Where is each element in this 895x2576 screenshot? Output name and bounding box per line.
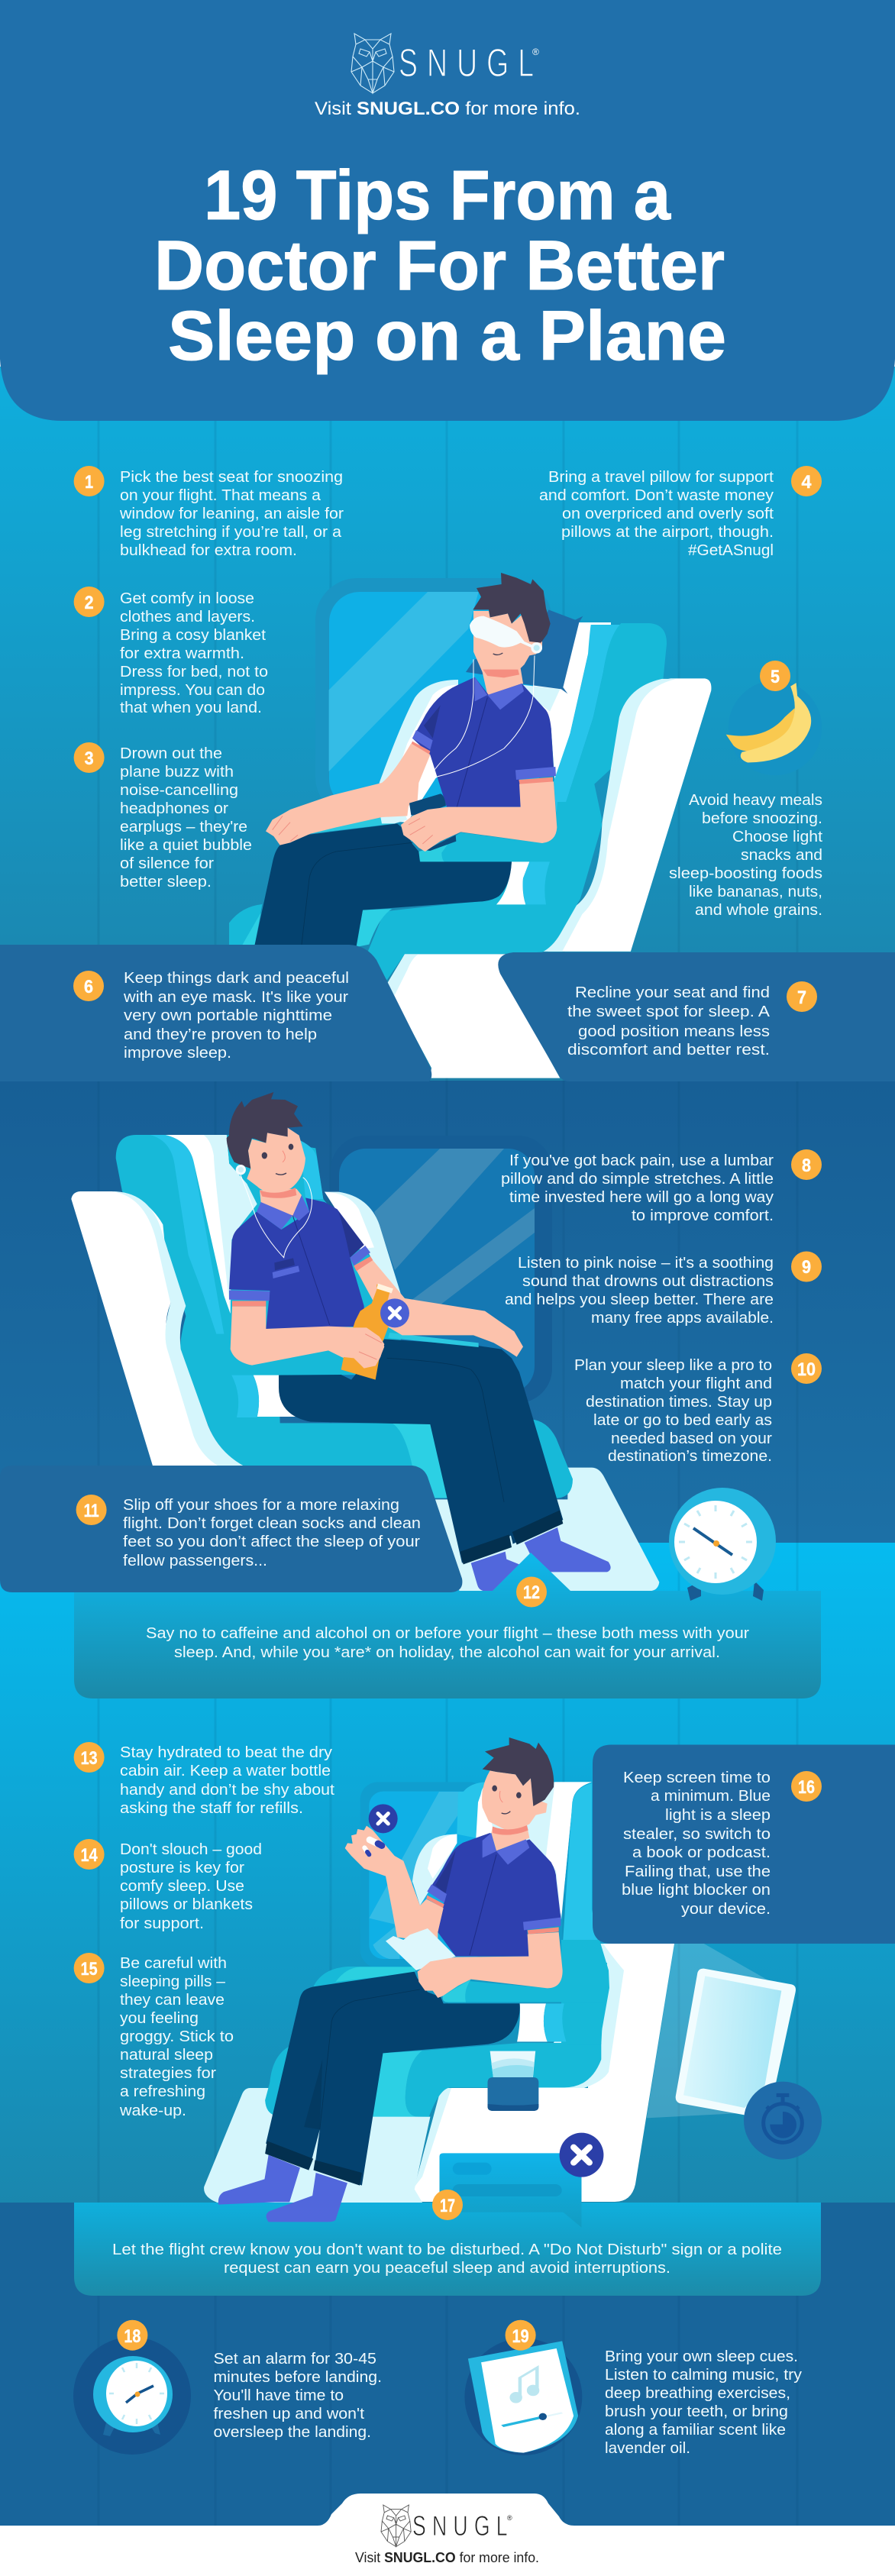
tip 14: 14 (81, 1845, 98, 1866)
icon: no-drink badge (380, 1298, 409, 1327)
panel: tip 7: discomfort and better rest. (567, 1042, 770, 1059)
footer logo: wordmark: SNUGL (412, 2510, 508, 2542)
tip 2: Dress for bed, not to (120, 664, 268, 680)
illustration: seat with sleeping man, eye mask (229, 573, 711, 1078)
tip 13 (74, 1742, 334, 1817)
tip 3: noise-cancelling (120, 782, 238, 799)
tip 5 with banana icon: Choose light (732, 829, 822, 845)
tip 4: Bring a travel pillow for support (548, 469, 774, 486)
tip 2: that when you land. (120, 700, 262, 716)
panel: tip 6: Keep things dark and peaceful (124, 970, 349, 987)
tip 15: 15 (81, 1959, 98, 1980)
tip 13: asking the staff for refills. (120, 1800, 303, 1817)
tip 14: pillows or blankets (120, 1896, 253, 1913)
footer logo: owl (381, 2505, 411, 2547)
tip 15: you feeling (120, 2010, 199, 2027)
tip 17 text and badge: request can earn you peaceful sleep and avoid interruptions. (224, 2260, 670, 2277)
tip 4 (539, 466, 822, 559)
tip 18 with clock icon (73, 2320, 382, 2455)
panel: tip 16: 16 (798, 1777, 815, 1798)
tip 17 text and badge: 17 (440, 2196, 455, 2216)
panel: tip 16: a book or podcast. (632, 1844, 771, 1861)
icon: music player card (464, 2338, 582, 2455)
tip 18 with clock icon: freshen up and won't (214, 2406, 364, 2422)
panel: tip 6: and they’re proven to help (124, 1026, 317, 1043)
tip 19 with music card icon: Listen to calming music, try (605, 2367, 802, 2384)
icon: no-pills badge (369, 1804, 398, 1833)
footer (0, 2494, 895, 2576)
illustration: seat with man holding a drink (71, 1092, 659, 1591)
tip 15: Be careful with (120, 1955, 227, 1972)
tip 9: many free apps available. (591, 1310, 774, 1327)
tip 2: 2 (85, 593, 94, 613)
tip 1: on your flight. That means a (120, 487, 321, 504)
tip 19 with music card icon: lavender oil. (605, 2440, 690, 2457)
tip 10: destination’s timezone. (608, 1448, 772, 1465)
panel: tip 16: Keep screen time to (623, 1770, 771, 1786)
icon: alarm clock (669, 1488, 776, 1601)
footer logo: registered mark: ® (507, 2514, 512, 2522)
illustration: seat with man and pills, book, water (204, 1737, 674, 2228)
background: dark cabin section (0, 1081, 895, 1543)
tip 5 with banana icon: sleep-boosting foods (669, 865, 822, 882)
tip 2: Bring a cosy blanket (120, 627, 266, 644)
tip 19 with music card icon (464, 2320, 802, 2457)
tip 15 (74, 1953, 234, 2119)
tip 10: needed based on your (611, 1430, 772, 1447)
panel: tip 12: Say no to caffeine and alcohol on or before your flight – these both mess with your (146, 1625, 749, 1642)
tip 5 with banana icon: 5 (771, 667, 780, 687)
tip 18 with clock icon: You'll have time to (214, 2387, 344, 2404)
icon: alarm clock on dark circle (73, 2337, 191, 2455)
tip 3: headphones or (120, 800, 228, 817)
tip 3: better sleep. (120, 874, 212, 890)
panel: tip 12: sleep. And, while you *are* on holiday, the alcohol can wait for your arrival. (174, 1644, 720, 1661)
tip 8: to improve comfort. (632, 1207, 774, 1224)
panel: tip 16: your device. (681, 1901, 771, 1918)
tip 17 text and badge: Let the flight crew know you don't want to be disturbed. A "Do Not Disturb" sign or a polite (112, 2241, 782, 2258)
title (154, 157, 726, 375)
icon: bananas (726, 680, 822, 775)
logo: wordmark: SNUGL (399, 40, 534, 85)
panel: tip 6: 6 (84, 977, 93, 997)
tip 1: Pick the best seat for snoozing (120, 469, 343, 486)
tip 8: If you've got back pain, use a lumbar (509, 1152, 774, 1169)
tip 5 with banana icon: and whole grains. (695, 902, 822, 919)
tip 10: destination times. Stay up (586, 1394, 772, 1411)
panel: tip 7: good position means less (578, 1023, 770, 1040)
tip 8 (501, 1149, 822, 1224)
title: 19 Tips From a (204, 157, 671, 234)
tip 1 (74, 466, 344, 559)
tip 19 with music card icon: deep breathing exercises, (605, 2385, 790, 2402)
panel: tip 11: Slip off your shoes for a more relaxing (123, 1497, 399, 1514)
tip 2: Get comfy in loose (120, 590, 254, 607)
tip 19 with music card icon: 19 (512, 2326, 529, 2347)
icon: water cup (488, 2051, 538, 2111)
icon: do not disturb speech bubble (439, 2133, 603, 2228)
tip 17 text and badge (112, 2190, 782, 2277)
tip 15: wake-up. (119, 2102, 186, 2119)
tip 10: late or go to bed early as (593, 1412, 772, 1429)
panel: tip 11: flight. Don’t forget clean socks and clean (123, 1515, 421, 1532)
tip 2: for extra warmth. (120, 645, 244, 662)
header panel (0, 0, 895, 421)
tip 4: and comfort. Don’t waste money (539, 487, 774, 504)
tip 5 with banana icon: snacks and (741, 847, 822, 864)
panel: tip 7: 7 (797, 987, 806, 1008)
tip 15: sleeping pills – (120, 1973, 226, 1990)
panel: tip 7: the sweet spot for sleep. A (567, 1004, 771, 1020)
tip 4: on overpriced and overly soft (562, 506, 774, 522)
tip 9: sound that drowns out distractions (522, 1273, 774, 1290)
title: Sleep on a Plane (168, 297, 726, 375)
panel: tip 17 background (74, 2203, 821, 2296)
background: bottom dark section (0, 2203, 895, 2526)
panel: tip 11: 11 (84, 1501, 99, 1521)
tip 10: Plan your sleep like a pro to (574, 1357, 772, 1374)
tip 9: and helps you sleep better. There are (505, 1291, 774, 1308)
tip 14: Don't slouch – good (120, 1841, 262, 1858)
tip 10: match your flight and (620, 1375, 772, 1392)
panel: tip 6 (0, 945, 431, 1081)
tip 15: they can leave (120, 1992, 225, 2009)
tip 8: time invested here will go a long way (509, 1189, 774, 1206)
tip 2 (74, 587, 268, 716)
panel: tip 12: 12 (523, 1582, 540, 1603)
tip 9: 9 (802, 1257, 811, 1278)
tip 3: 3 (85, 748, 94, 769)
panel: tip 6: very own portable nighttime (124, 1007, 332, 1024)
tip 18 with clock icon: oversleep the landing. (214, 2424, 371, 2441)
tip 18 with clock icon: 18 (124, 2326, 141, 2347)
footer link text: Visit SNUGL.CO for more info. (355, 2550, 539, 2565)
logo: registered mark: ® (532, 47, 539, 57)
tip 13: cabin air. Keep a water bottle (120, 1763, 331, 1779)
tip 9 (505, 1251, 822, 1327)
tip 19 with music card icon: along a familiar scent like (605, 2422, 786, 2439)
panel: tip 16: a minimum. Blue (651, 1788, 771, 1805)
tip 2: impress. You can do (120, 682, 265, 699)
tip 4: #GetASnugl (688, 542, 774, 559)
tip 3: like a quiet bubble (120, 837, 252, 854)
tip 14: comfy sleep. Use (120, 1878, 244, 1895)
panel: tip 16: stealer, so switch to (623, 1826, 771, 1843)
panel: tip 11: feet so you don’t affect the sleep of your (123, 1534, 420, 1550)
panel: tip 11 (0, 1466, 462, 1592)
tip 1: bulkhead for extra room. (120, 542, 297, 559)
background: bright cabin section (0, 1543, 895, 2203)
logo: owl (351, 34, 394, 93)
tip 4: 4 (802, 472, 812, 493)
panel: tip 6: with an eye mask. It's like your (123, 989, 348, 1006)
panel: tip 7: Recline your seat and find (575, 984, 770, 1001)
panel: tip 16: light is a sleep (665, 1807, 771, 1824)
tip 1: window for leaning, an aisle for (119, 506, 344, 522)
panel: tip 6: improve sleep. (124, 1045, 231, 1062)
tip 19 with music card icon: brush your teeth, or bring (605, 2403, 788, 2420)
tip 15: strategies for (120, 2065, 216, 2082)
tip 14 (74, 1839, 262, 1932)
background: light cabin section (0, 367, 895, 1081)
tip 13: 13 (81, 1748, 98, 1769)
tip 2: clothes and layers. (120, 609, 255, 625)
panel: tip 11: fellow passengers... (123, 1553, 267, 1569)
tip 5 with banana icon (669, 661, 822, 919)
panel: tip 16: blue light blocker on (622, 1882, 771, 1899)
tip 10: 10 (797, 1359, 816, 1380)
tip 15: natural sleep (120, 2047, 213, 2064)
tip 10 (574, 1353, 822, 1465)
tip 5 with banana icon: like bananas, nuts, (689, 884, 822, 900)
tip 3: plane buzz with (120, 764, 234, 781)
tip 1: 1 (85, 472, 93, 493)
panel: tip 16 (593, 1744, 895, 1944)
tip 13: Stay hydrated to beat the dry (120, 1744, 332, 1761)
icon: tablet and stopwatch (647, 1928, 822, 2160)
tip 9: Listen to pink noise – it's a soothing (518, 1255, 774, 1272)
tip 1: leg stretching if you’re tall, or a (120, 524, 342, 541)
tip 15: a refreshing (120, 2083, 205, 2100)
tip 5 with banana icon: Avoid heavy meals (689, 792, 822, 809)
tip 3: Drown out the (120, 745, 222, 762)
tip 18 with clock icon: Set an alarm for 30-45 (214, 2351, 376, 2368)
tip 3: earplugs – they're (120, 819, 247, 836)
tip 18 with clock icon: minutes before landing. (214, 2369, 382, 2386)
panel: tip 12 (74, 1553, 821, 1698)
header link text: Visit SNUGL.CO for more info. (315, 99, 580, 119)
tip 3: of silence for (120, 855, 214, 872)
panel: tip 16: Failing that, use the (625, 1863, 771, 1880)
tip 8: pillow and do simple stretches. A little (501, 1171, 774, 1188)
tip 14: for support. (120, 1915, 204, 1932)
tip 19 with music card icon: Bring your own sleep cues. (605, 2348, 798, 2365)
tip 4: pillows at the airport, though. (561, 524, 774, 541)
tip 13: handy and don’t be shy about (120, 1782, 334, 1799)
tip 8: 8 (802, 1155, 811, 1176)
tip 14: posture is key for (120, 1860, 244, 1876)
panel: tip 7 (498, 952, 895, 1081)
tip 3 (74, 742, 252, 890)
title: Doctor For Better (154, 227, 725, 305)
tip 5 with banana icon: before snoozing. (702, 810, 822, 827)
tip 15: groggy. Stick to (120, 2028, 234, 2045)
